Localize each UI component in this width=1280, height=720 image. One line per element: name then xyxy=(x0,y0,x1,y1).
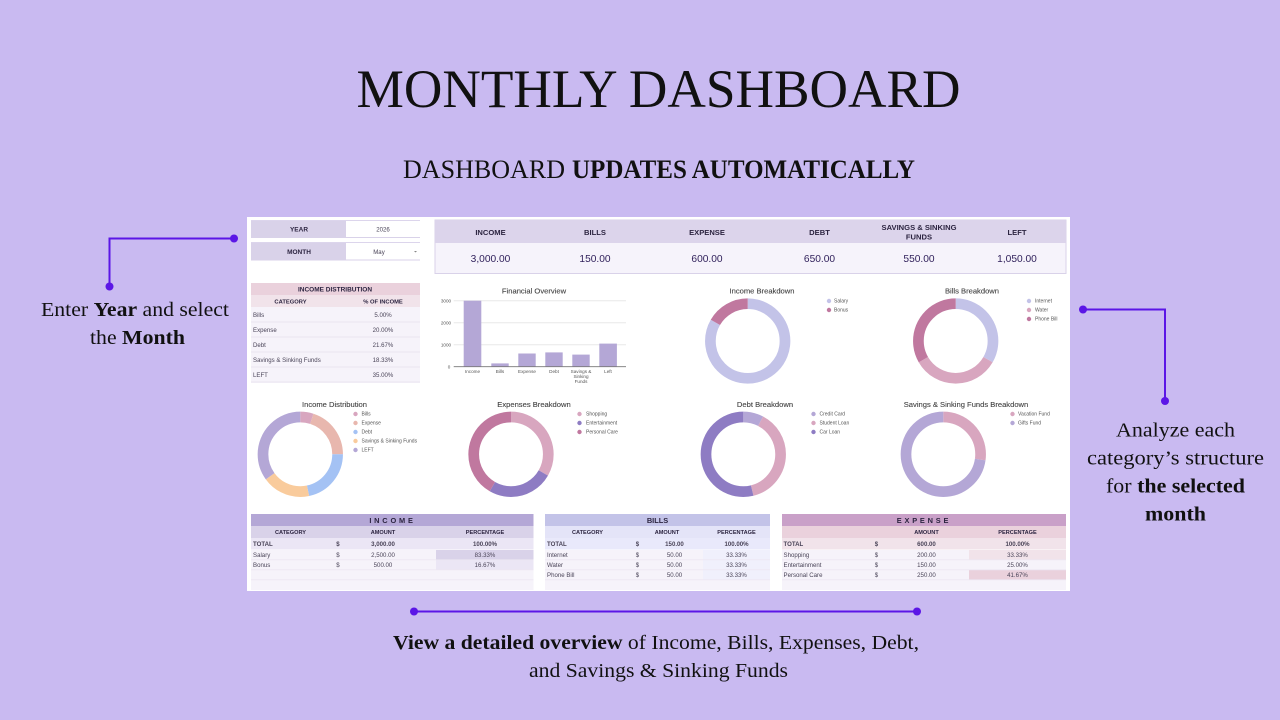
donut: bills breakdown xyxy=(918,286,1058,378)
donut: debt breakdown: Car Loan xyxy=(820,430,840,436)
donut: income distribution: Income Distribution xyxy=(302,400,367,409)
income distribution table: % OF INCOME xyxy=(363,300,403,306)
table: expense: EXPENSE xyxy=(897,516,951,525)
donut: savings and sinking funds breakdown: Savings & Sinking Funds Breakdown xyxy=(904,400,1028,409)
donut: debt breakdown: Credit Card xyxy=(820,412,845,418)
donut: income breakdown: Bonus xyxy=(834,308,849,314)
table: income: TOTAL xyxy=(253,541,273,548)
callout: enter year and month xyxy=(41,299,229,349)
bar chart: financial overview: Debt xyxy=(549,369,560,374)
donut: debt breakdown xyxy=(706,400,849,492)
bar chart: financial overview: Sinking xyxy=(573,374,589,379)
donut: expenses breakdown: Entertainment xyxy=(586,421,618,427)
table: bills: PERCENTAGE xyxy=(717,530,756,536)
table: income: CATEGORY xyxy=(275,530,306,536)
callout: enter year and month: the Month xyxy=(90,327,186,349)
callout: detailed overview: View a detailed overview of Income, Bills, Expenses, Debt, xyxy=(393,632,919,654)
table: income: $ xyxy=(336,552,340,559)
callout: detailed overview: and Savings & Sinking Funds xyxy=(529,660,788,682)
income distribution table: CATEGORY xyxy=(274,300,307,306)
table: bills: AMOUNT xyxy=(655,530,680,536)
summary cards xyxy=(435,220,1066,274)
bar chart: financial overview: 2000 xyxy=(441,320,452,326)
summary cards: 550.00 xyxy=(903,254,935,265)
summary cards: DEBT xyxy=(809,228,830,237)
summary cards: FUNDS xyxy=(906,232,932,242)
table: expense: 100.00% xyxy=(1005,541,1030,548)
income distribution table: 20.00% xyxy=(373,327,394,334)
table: bills: Internet xyxy=(547,552,568,559)
donut: income breakdown: Income Breakdown xyxy=(729,286,795,296)
table: bills: $ xyxy=(636,541,640,548)
bar chart: financial overview: 1000 xyxy=(441,342,452,348)
donut: expenses breakdown: Personal Care xyxy=(586,430,618,436)
month selector: MONTH xyxy=(287,249,311,256)
donut: income distribution xyxy=(263,400,418,492)
donut: income distribution: Debt xyxy=(362,430,373,436)
subtitle xyxy=(403,155,915,184)
table: bills: 33.33% xyxy=(726,572,747,579)
table: bills: $ xyxy=(636,562,640,569)
donut: income breakdown xyxy=(710,286,849,378)
table: expense: Shopping xyxy=(784,552,809,559)
table: expense: 41.67% xyxy=(1007,572,1028,579)
month selector xyxy=(251,242,420,260)
table: bills: $ xyxy=(636,572,640,579)
summary cards: 1,050.00 xyxy=(997,254,1037,265)
table: bills: 100.00% xyxy=(724,541,749,548)
table: expense: 25.00% xyxy=(1007,562,1028,569)
callout: analyze structure: Analyze each xyxy=(1116,420,1235,442)
table: income: INCOME xyxy=(369,516,416,525)
donut: savings and sinking funds breakdown: Vacation Fund xyxy=(1018,412,1050,418)
table: expense: $ xyxy=(875,572,879,579)
subtitle: DASHBOARD xyxy=(403,155,565,184)
bar chart: financial overview: 3000 xyxy=(441,298,452,304)
donut: expenses breakdown xyxy=(474,400,618,492)
income distribution table: Expense xyxy=(253,327,277,334)
table: bills: Phone Bill xyxy=(547,572,574,579)
table: bills: BILLS xyxy=(647,516,668,525)
callout: analyze structure xyxy=(1087,420,1264,526)
table: expense: Personal Care xyxy=(784,572,823,579)
callout: analyze structure: for the selected xyxy=(1106,476,1246,498)
summary cards: LEFT xyxy=(1008,228,1027,237)
dashboard panel xyxy=(247,217,1070,591)
table: bills: 50.00 xyxy=(667,572,683,579)
donut: income distribution: LEFT xyxy=(362,448,374,454)
table: expense: AMOUNT xyxy=(914,530,939,536)
donut: bills breakdown: Bills Breakdown xyxy=(945,286,999,296)
table: expense: 200.00 xyxy=(917,552,936,559)
income distribution table: Debt xyxy=(253,342,266,349)
table: expense: 150.00 xyxy=(917,562,936,569)
donut: bills breakdown: Phone Bill xyxy=(1035,317,1058,323)
table: income: 83.33% xyxy=(475,552,496,559)
income distribution table: 21.67% xyxy=(373,342,394,349)
table: bills xyxy=(545,514,770,590)
donut: income distribution: Savings & Sinking Funds xyxy=(362,439,418,445)
table: bills: 50.00 xyxy=(667,552,683,559)
table: income: 2,500.00 xyxy=(371,552,395,559)
year selector: YEAR xyxy=(290,226,308,234)
summary cards: EXPENSE xyxy=(689,228,725,237)
table: bills: TOTAL xyxy=(547,541,567,548)
donut: income breakdown: Salary xyxy=(834,299,849,305)
donut: expenses breakdown: Shopping xyxy=(586,412,607,418)
donut: bills breakdown: Water xyxy=(1035,308,1048,314)
table: expense: Entertainment xyxy=(784,562,822,569)
table: expense: $ xyxy=(875,552,879,559)
table: bills: 33.33% xyxy=(726,562,747,569)
table: expense: TOTAL xyxy=(784,541,804,548)
income distribution table: Bills xyxy=(253,312,264,319)
callout: analyze structure: category’s structure xyxy=(1087,448,1264,470)
bar chart: financial overview: Income xyxy=(465,369,480,374)
table: income: $ xyxy=(336,562,340,569)
table: bills: 50.00 xyxy=(667,562,683,569)
income distribution table: INCOME DISTRIBUTION xyxy=(298,286,372,294)
bar chart: financial overview: Left xyxy=(604,369,613,374)
table: expense: $ xyxy=(875,541,879,548)
table: income: 500.00 xyxy=(374,562,393,569)
table: expense xyxy=(782,514,1066,590)
table: income: PERCENTAGE xyxy=(466,530,504,536)
table: bills: 150.00 xyxy=(665,541,684,548)
table: income: AMOUNT xyxy=(371,530,396,536)
arrow: year and month connector xyxy=(106,234,238,290)
income distribution table: Savings & Sinking Funds xyxy=(253,357,321,364)
arrow: detailed overview connector xyxy=(410,608,921,616)
table: income: Bonus xyxy=(253,562,270,569)
income distribution table xyxy=(251,283,420,383)
donut: savings and sinking funds breakdown xyxy=(904,400,1050,492)
bar chart: financial overview: Savings & xyxy=(571,369,591,374)
summary cards: BILLS xyxy=(584,228,606,237)
bar chart: financial overview: Funds xyxy=(575,379,588,384)
donut: expenses breakdown: Expenses Breakdown xyxy=(497,400,571,409)
income distribution table: LEFT xyxy=(253,372,268,379)
table: income: 100.00% xyxy=(473,541,498,548)
donut: bills breakdown: Internet xyxy=(1035,299,1053,305)
subtitle: UPDATES AUTOMATICALLY xyxy=(572,155,915,184)
table: expense: 33.33% xyxy=(1007,552,1028,559)
callout: enter year and month: Enter Year and select xyxy=(41,299,229,321)
table: income: 3,000.00 xyxy=(371,541,395,548)
table: bills: $ xyxy=(636,552,640,559)
bar chart: financial overview xyxy=(441,286,626,384)
title: MONTHLY DASHBOARD xyxy=(356,59,960,119)
income distribution table: 18.33% xyxy=(373,357,394,364)
donut: debt breakdown: Student Loan xyxy=(820,421,849,427)
callout: analyze structure: month xyxy=(1145,504,1207,526)
summary cards: 150.00 xyxy=(579,254,611,265)
income distribution table: 35.00% xyxy=(373,372,394,379)
income distribution table: 5.00% xyxy=(374,312,392,319)
table: bills: 33.33% xyxy=(726,552,747,559)
donut: income distribution: Bills xyxy=(362,412,371,418)
table: income: $ xyxy=(336,541,340,548)
summary cards: 650.00 xyxy=(804,254,835,265)
summary cards: 600.00 xyxy=(691,254,723,265)
donut: income distribution: Expense xyxy=(362,421,381,427)
year selector: 2026 xyxy=(376,226,390,234)
table: expense: 600.00 xyxy=(917,541,936,548)
table: bills: CATEGORY xyxy=(572,530,603,536)
bar chart: financial overview: Bills xyxy=(496,369,505,374)
year selector xyxy=(251,220,420,238)
table: expense: 250.00 xyxy=(917,572,936,579)
summary cards: SAVINGS & SINKING xyxy=(882,223,957,232)
table: income: Salary xyxy=(253,552,271,559)
table: expense: $ xyxy=(875,562,879,569)
summary cards: INCOME xyxy=(475,228,506,237)
bar chart: financial overview: Financial Overview xyxy=(502,286,567,296)
donut: savings and sinking funds breakdown: Gifts Fund xyxy=(1018,421,1041,427)
callout: detailed overview xyxy=(393,632,919,682)
table: bills: Water xyxy=(547,562,563,569)
bar chart: financial overview: 0 xyxy=(448,364,451,370)
summary cards: 3,000.00 xyxy=(471,254,511,265)
table: income: 16.67% xyxy=(475,562,496,569)
table: expense: PERCENTAGE xyxy=(998,530,1037,536)
bar chart: financial overview: Expense xyxy=(518,369,536,374)
donut: debt breakdown: Debt Breakdown xyxy=(737,400,793,409)
arrow: category structure connector xyxy=(1079,306,1169,405)
month selector: May xyxy=(373,249,386,256)
table: income xyxy=(251,514,534,590)
